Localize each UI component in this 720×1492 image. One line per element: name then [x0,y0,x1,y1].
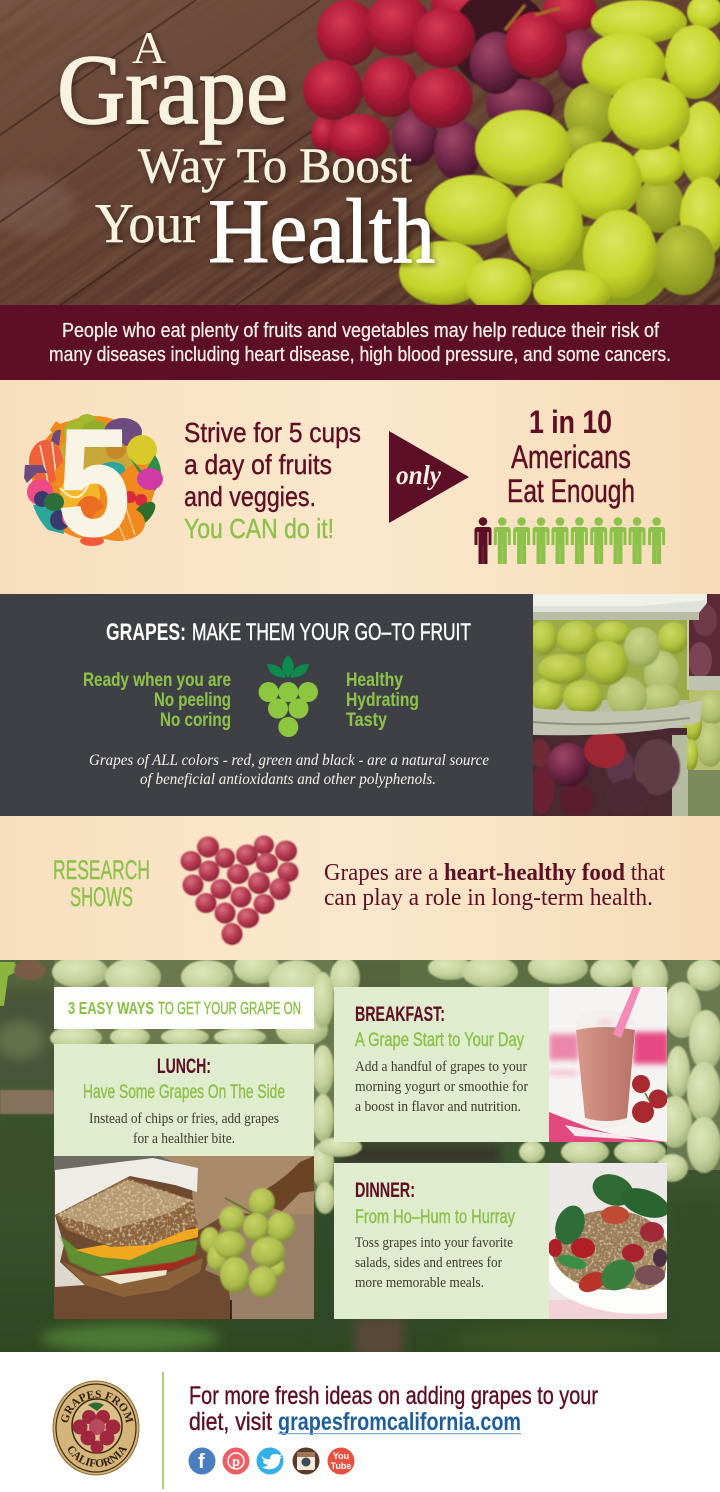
list: convenience: Ready when you are [83,670,231,691]
icon: twitter [256,1448,284,1474]
text: more ideas: diet, visit [189,1408,272,1436]
intro banner: People who eat plenty of fruits and vegetables may help reduce their risk of [62,320,659,342]
list: benefits: Healthy [346,670,403,691]
text: antioxidants [89,752,489,788]
card: dinner: From Ho–Hum to Hurray [355,1207,515,1228]
title: Your [95,193,200,255]
card: lunch [54,1044,314,1319]
green grapes [399,0,720,315]
text: strive for 5 cups: and veggies. [184,481,316,512]
icon: pinterest [222,1448,250,1474]
heading: GRAPES: [106,619,186,646]
card: lunch: Instead of chips or fries, add grapes [89,1111,279,1127]
text: strive for 5 cups [184,417,361,544]
card: lunch: Have Some Grapes On The Side [83,1082,285,1103]
list: benefits [346,670,419,731]
icon: grape cluster [259,655,318,737]
panel: go-to fruit [0,594,720,816]
photo: salad [549,1163,667,1319]
heading: research shows [53,855,150,912]
title: Grape [57,34,288,145]
photo: containers of grapes [529,594,720,816]
photo: sandwich and grapes [54,1156,314,1319]
card: lunch: LUNCH: [157,1055,211,1078]
heading: research shows: RESEARCH [53,855,150,885]
icon: facebook: f [198,1451,205,1473]
pictogram: 1 of 10 people [474,517,665,564]
heading: 3 easy ways [54,987,314,1029]
text: more ideas [189,1382,598,1436]
panel: 3 easy ways [0,952,720,1358]
red grapes [303,0,604,180]
card: breakfast: A Grape Start to Your Day [355,1030,524,1051]
text: heart-healthy food: Grapes are a heart-healthy food that [324,859,665,886]
card: breakfast: morning yogurt or smoothie for [355,1079,528,1095]
panel: research shows [0,816,720,960]
heading [106,619,471,646]
card: breakfast [334,985,669,1142]
list: convenience [83,670,231,731]
heading: 3 easy ways: 3 EASY WAYS [68,998,154,1018]
list: benefits: Hydrating [346,690,419,711]
title: A [132,23,167,73]
icon: youtube [328,1448,354,1474]
logo: grapes from california [52,1380,140,1476]
header photo: grapes on wood with title [0,0,720,305]
text: heart-healthy food: can play a role in long-term health. [324,884,653,911]
intro banner [0,305,720,380]
icon: facebook [188,1448,216,1474]
icon: youtube: Tube [331,1461,351,1471]
card: dinner: salads, sides and entrees for [355,1255,502,1271]
background photo: grapes on the vine [0,952,720,1358]
list: benefits: Tasty [346,710,387,731]
icon: colorful fruit and vegetable circle with 5 [24,398,163,568]
text: strive for 5 cups: Strive for 5 cups [184,417,361,448]
title: Health [208,180,435,282]
title [57,23,435,282]
logo: grapes from california: GRAPES FROM [61,1390,134,1424]
card: dinner: Toss grapes into your favorite [355,1235,513,1251]
heading: MAKE THEM YOUR GO–TO FRUIT [192,619,471,646]
card: breakfast: BREAKFAST: [355,1003,445,1026]
list: convenience: No peeling [154,690,231,711]
text: more ideas: grapesfromcalifornia.com [278,1408,521,1436]
arrow: only [389,431,469,523]
card: dinner: more memorable meals. [355,1275,484,1291]
text: antioxidants: Grapes of ALL colors - red, green and black - are a natural source [89,752,489,769]
card: lunch: for a healthier bite. [133,1131,235,1147]
text: heart-healthy food [324,859,665,911]
text: 1 in 10 Americans eat enough [507,404,635,509]
text: 1 in 10 Americans eat enough: Eat Enough [507,473,635,509]
icon: instagram [292,1448,320,1474]
icon: youtube: You [333,1451,349,1461]
photo: smoothie [549,985,669,1142]
text: 1 in 10 Americans eat enough: Americans [511,439,631,475]
title: Way To Boost [138,137,412,193]
icon: pinterest: p [232,1454,240,1469]
text: more ideas: For more fresh ideas on adding grapes to your [189,1382,598,1410]
icon: heart of red grapes [180,836,298,945]
heading: 3 easy ways: TO GET YOUR GRAPE ON [158,998,301,1018]
logo: grapes from california: CALIFORNIA [68,1446,128,1467]
card: dinner: DINNER: [355,1179,415,1202]
icon: colorful fruit and vegetable circle with 5: 5 [58,398,130,568]
arrow: only: only [396,460,442,490]
wood background [0,0,720,305]
card: breakfast: Add a handful of grapes to your [355,1059,527,1075]
card: breakfast: a boost in flavor and nutrition. [355,1099,521,1115]
panel: 5 cups a day [0,380,720,594]
heading: research shows: SHOWS [70,882,133,912]
card: dinner [334,1163,667,1319]
text: antioxidants: of beneficial antioxidants and other polyphenols. [140,771,436,788]
text: strive for 5 cups: You CAN do it! [184,513,334,544]
list: convenience: No coring [160,710,231,731]
text: strive for 5 cups: a day of fruits [184,449,332,480]
footer [52,1372,598,1489]
text: 1 in 10 Americans eat enough: 1 in 10 [529,404,612,440]
